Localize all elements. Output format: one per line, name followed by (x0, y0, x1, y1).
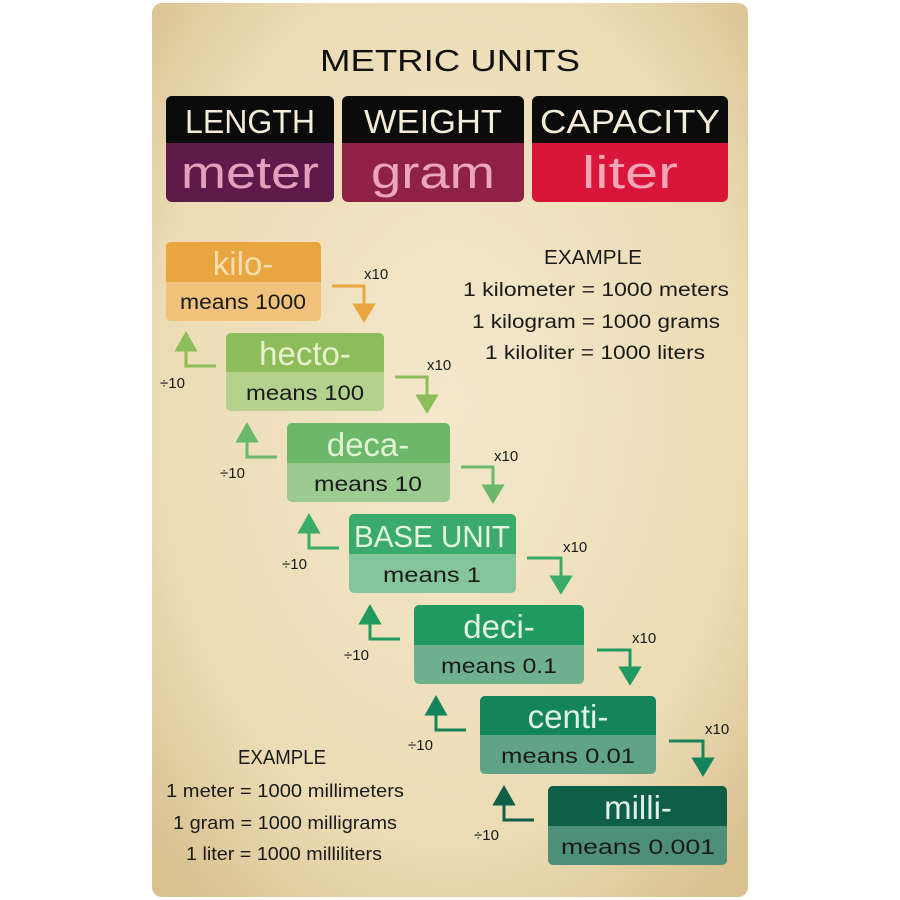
example bottom: 1 gram = 1000 milligrams (173, 813, 397, 833)
arrow: deca x10: x10 (494, 448, 518, 465)
box: deci: deci- (463, 608, 535, 645)
header: capacity (532, 96, 728, 202)
example bottom: EXAMPLE (238, 747, 326, 769)
arrow: base /10 (344, 607, 400, 664)
arrow: kilo /10 (160, 334, 216, 392)
arrow: centi x10: x10 (705, 721, 729, 738)
box: hecto: hecto- (259, 335, 351, 372)
box: kilo: means 1000 (180, 291, 306, 314)
arrow: deca /10: ÷10 (282, 556, 307, 573)
arrow: hecto x10 (395, 357, 451, 411)
arrow: deca x10 (461, 448, 518, 501)
header: length (166, 96, 334, 202)
box: milli (548, 786, 727, 865)
arrow: base x10: x10 (563, 539, 587, 556)
arrow: deci /10: ÷10 (408, 737, 433, 754)
header: capacity: CAPACITY (540, 103, 720, 140)
arrow: deci x10: x10 (632, 630, 656, 647)
arrow: deci /10 (408, 698, 466, 754)
example top: 1 kiloliter = 1000 liters (485, 343, 705, 364)
example top: 1 kilogram = 1000 grams (472, 312, 720, 333)
header: length: meter (181, 147, 319, 198)
title: METRIC UNITS (320, 43, 580, 78)
box: kilo (166, 242, 321, 321)
header: length: LENGTH (185, 103, 315, 140)
example top (463, 247, 729, 364)
box: deca: means 10 (314, 473, 422, 496)
example bottom: 1 liter = 1000 milliliters (186, 844, 382, 864)
arrow: hecto x10: x10 (427, 357, 451, 374)
background panel (152, 3, 748, 897)
header: capacity: liter (582, 147, 678, 198)
header: weight (342, 96, 524, 202)
box: deca (287, 423, 450, 502)
box: base unit: BASE UNIT (354, 519, 510, 554)
header: weight: WEIGHT (364, 103, 502, 140)
box: centi: means 0.01 (501, 745, 635, 768)
box: deci: means 0.1 (441, 655, 557, 678)
box: kilo: kilo- (213, 245, 273, 282)
example bottom (166, 747, 404, 864)
arrow: kilo x10 (332, 266, 388, 320)
arrow: deca /10 (282, 516, 339, 573)
box: hecto: means 100 (246, 382, 364, 405)
example bottom: 1 meter = 1000 millimeters (166, 781, 404, 801)
arrow: deci x10 (597, 630, 656, 683)
arrow: hecto /10: ÷10 (220, 465, 245, 482)
box: centi (480, 696, 656, 774)
example top: EXAMPLE (544, 247, 642, 269)
arrow: base /10: ÷10 (344, 647, 369, 664)
arrow: kilo x10: x10 (364, 266, 388, 283)
arrow: centi /10: ÷10 (474, 827, 499, 844)
box: deca: deca- (327, 426, 409, 463)
box: milli: milli- (604, 789, 672, 826)
box: base unit (349, 514, 516, 593)
header: weight: gram (371, 147, 495, 198)
box: hecto (226, 333, 384, 411)
example top: 1 kilometer = 1000 meters (463, 280, 729, 301)
box: centi: centi- (528, 698, 608, 735)
box: base unit: means 1 (383, 564, 481, 587)
arrow: centi /10 (474, 788, 534, 844)
arrow: hecto /10 (220, 425, 277, 482)
arrow: base x10 (527, 539, 587, 592)
arrow: centi x10 (669, 721, 729, 774)
arrow: kilo /10: ÷10 (160, 375, 185, 392)
box: deci (414, 605, 584, 684)
box: milli: means 0.001 (561, 836, 715, 859)
